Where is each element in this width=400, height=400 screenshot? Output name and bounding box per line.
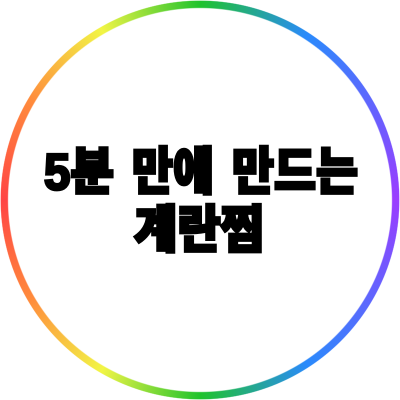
title line 1: 만드는: [232, 144, 358, 200]
title line 2: 계란찜: [134, 202, 264, 258]
title line 1: 만에: [132, 144, 214, 200]
title line 1: [44, 144, 358, 200]
title line 1: 5분: [44, 144, 114, 200]
